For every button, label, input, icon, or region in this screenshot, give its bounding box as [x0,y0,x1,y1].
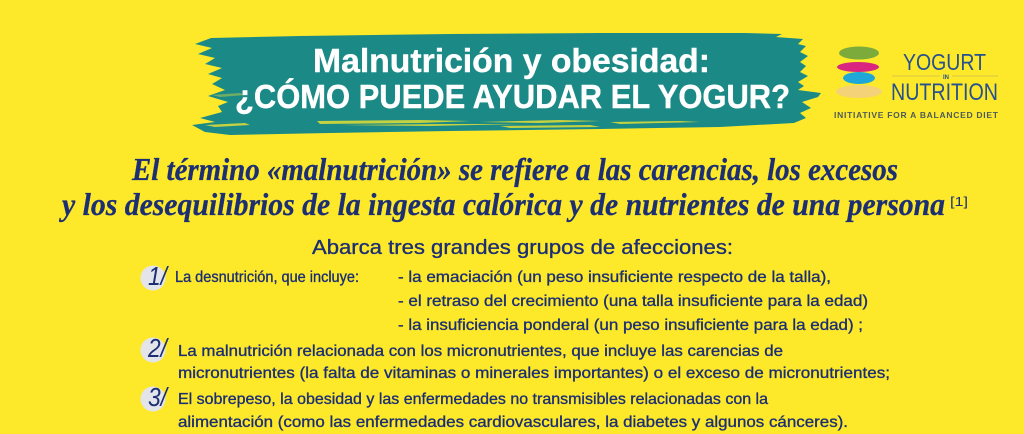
title line 1: Malnutrición y obesidad: [313,42,710,79]
number badge 2: 2/ [147,333,169,363]
item 1 list [398,269,868,334]
subheading [58,151,968,222]
logo: Yogurt in Nutrition [834,46,999,120]
logo text: INITIATIVE FOR A BALANCED DIET [834,110,999,120]
item 1 [140,261,868,334]
item 2 text: La malnutrición relacionada con los micronutrientes, que incluye las carencias de [178,343,783,360]
subheading: y los desequilibrios de la ingesta calórica y de nutrientes de una persona [58,186,945,222]
item 1 list: - el retraso del crecimiento (una talla insuficiente para la edad) [398,293,868,310]
logo text [834,49,999,120]
item 3 text: alimentación (como las enfermedades cardiovasculares, la diabetes y algunos cánceres). [178,414,848,431]
section heading: Abarca tres grandes grupos de afecciones: [312,237,733,259]
subheading: [1] [950,194,968,209]
title line 2: ¿CÓMO PUEDE AYUDAR EL YOGUR? [235,78,790,115]
item 3 text: El sobrepeso, la obesidad y las enfermedades no transmisibles relacionadas con la [178,391,768,408]
item 1 intro: La desnutrición, que incluye: [175,269,359,286]
logo text: YOGURT [903,49,986,75]
number badge 1: 1/ [148,261,169,291]
item 3 [140,382,848,431]
item 1 list: - la emaciación (un peso insuficiente respecto de la talla), [398,269,831,286]
brush stroke [192,33,821,135]
logo text: NUTRITION [891,79,998,106]
item 2 text: micronutrientes (la falta de vitaminas o minerales importantes) o el exceso de micronutrientes; [178,365,890,382]
item 2 text [178,343,890,382]
brush streaks [205,93,700,128]
item 3 text [178,391,848,431]
logo text: IN [943,75,949,81]
item 1 list: - la insuficiencia ponderal (un peso insuficiente para la edad) ; [398,317,863,334]
number badge 3: 3/ [148,382,169,412]
item 2 [140,333,890,382]
title banner [192,33,821,135]
subheading: El término «malnutrición» se refiere a las carencias, los excesos [131,151,898,187]
icon: stacked pebbles [836,46,882,98]
